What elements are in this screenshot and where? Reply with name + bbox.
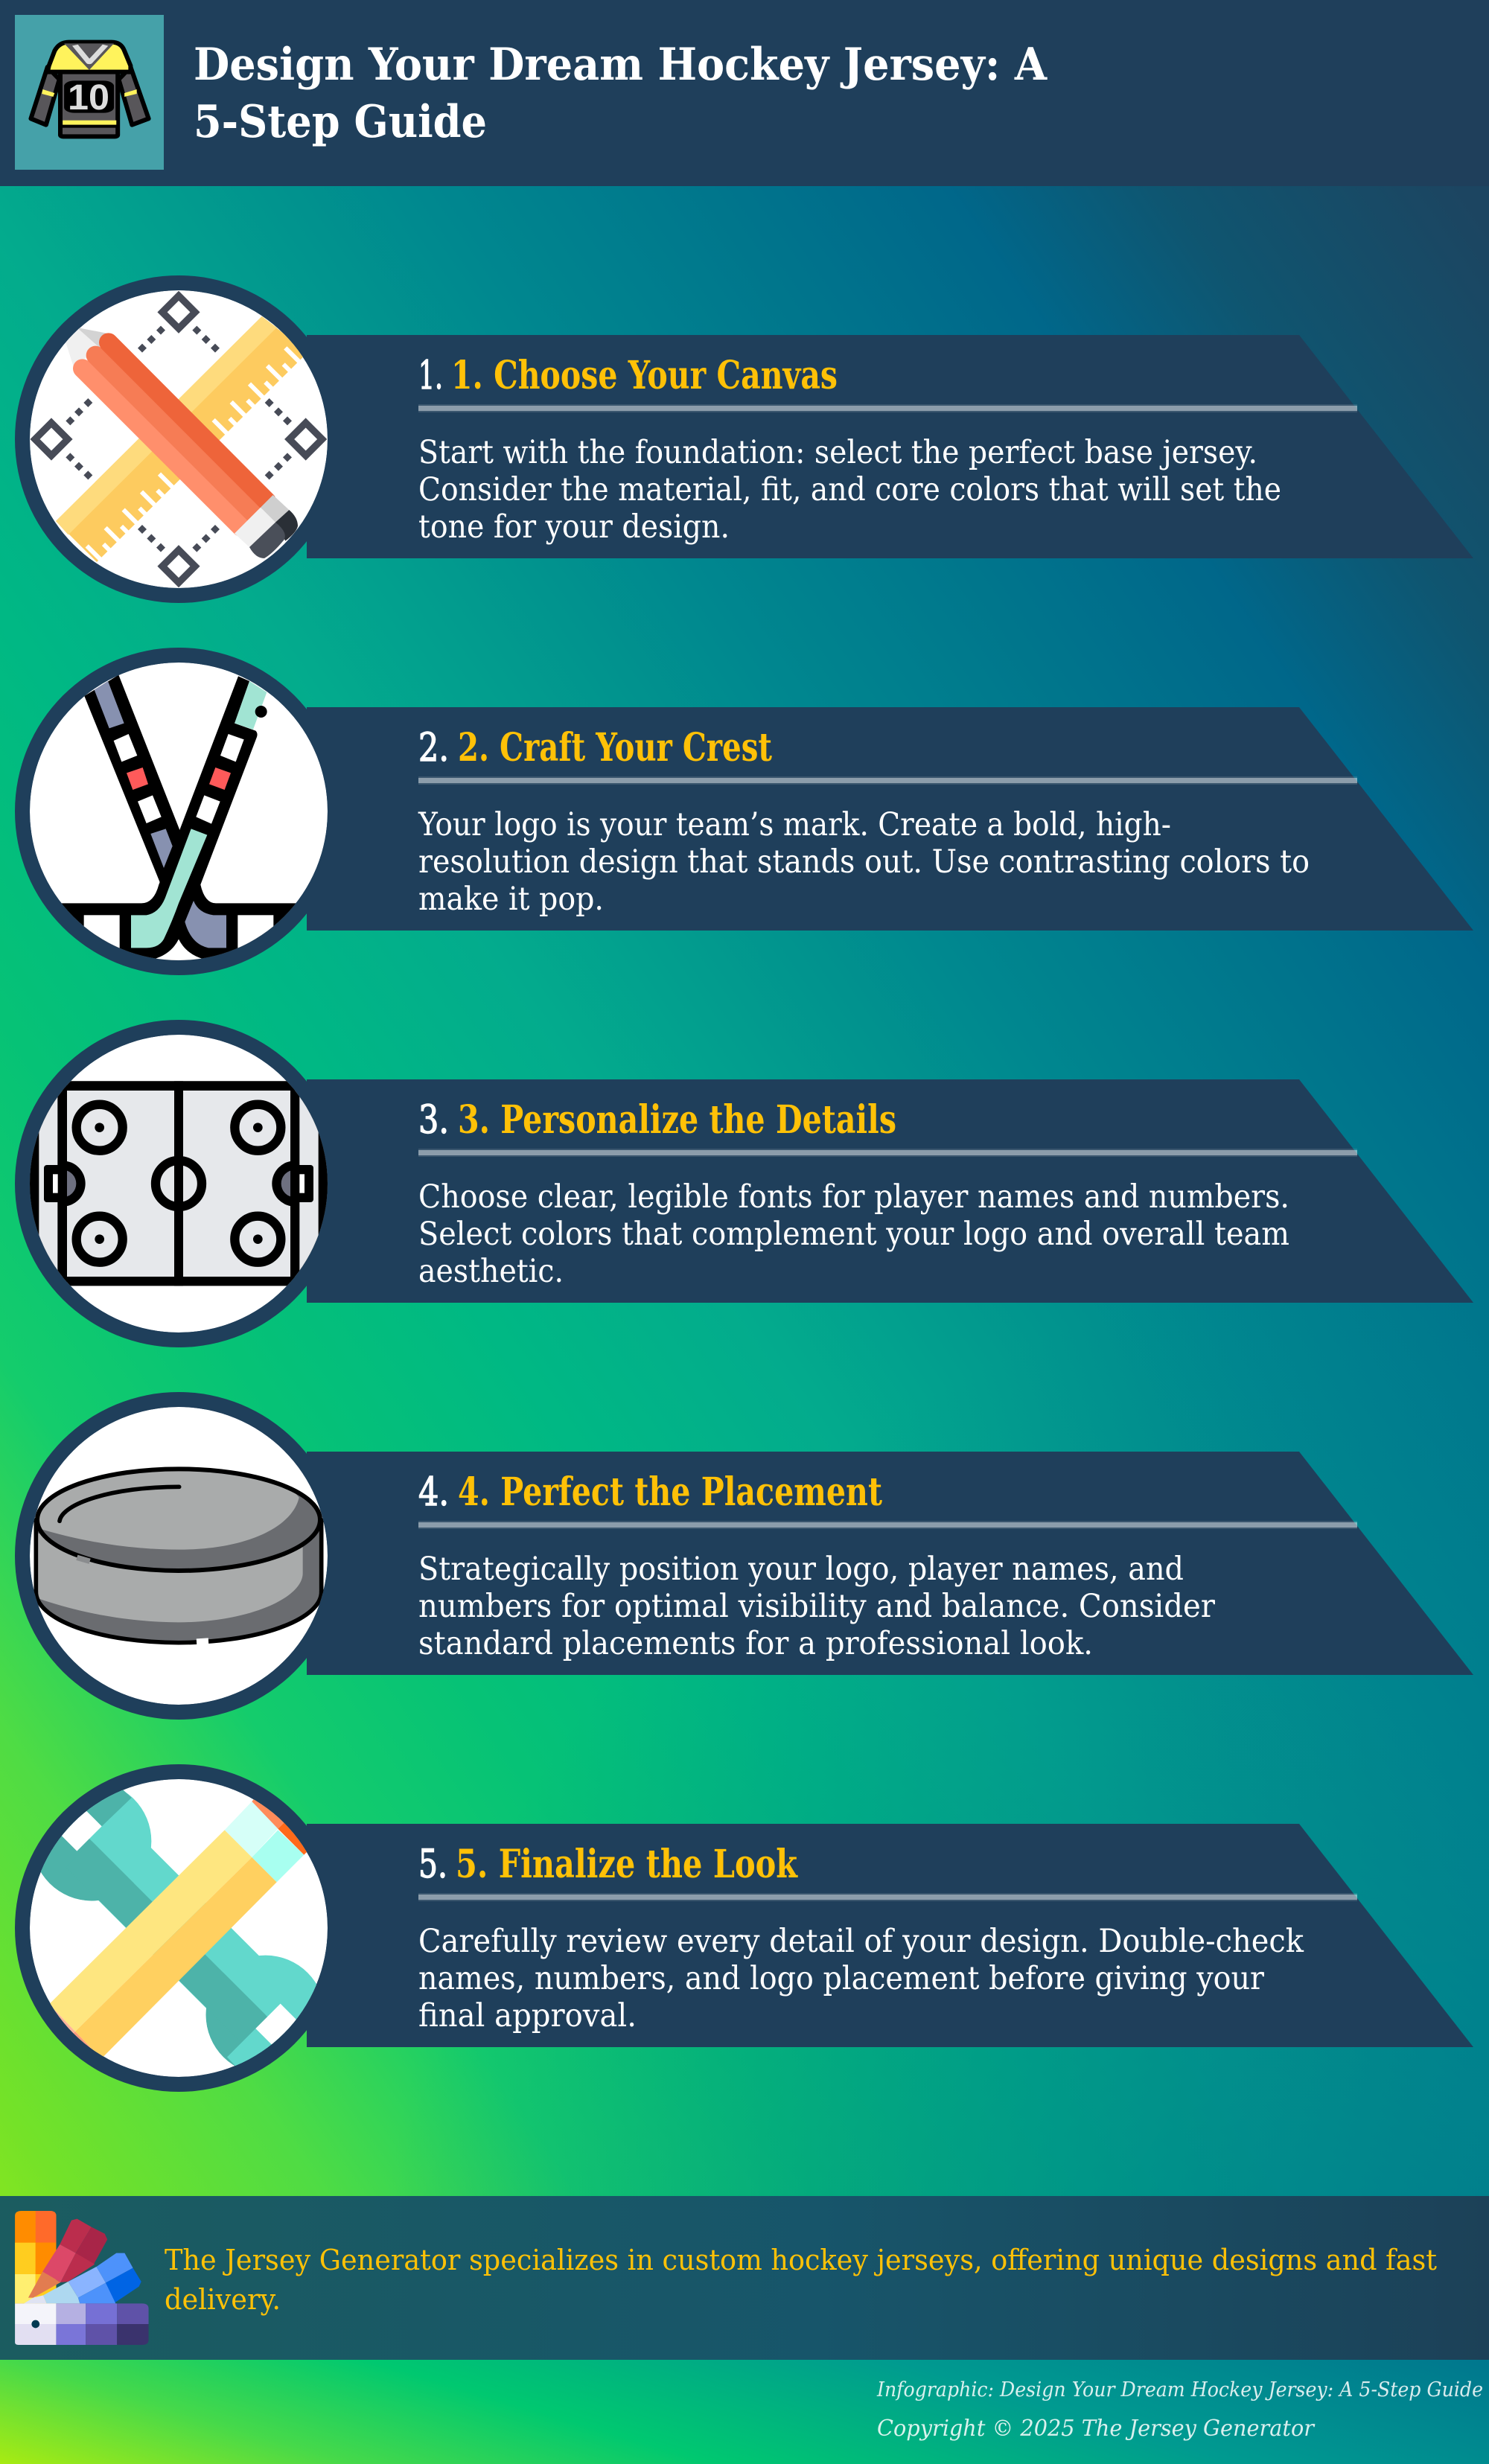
step 5: finalize the look xyxy=(15,1764,1473,2092)
header thumbnail tile with jersey icon: 10 xyxy=(68,78,109,118)
icon: colour swatch fan xyxy=(15,2211,149,2345)
step 2: craft your crest xyxy=(15,648,1473,975)
step 3 banner xyxy=(307,1079,1473,1303)
step 1 body text: tone for your design. xyxy=(418,508,730,546)
step 3 body text xyxy=(418,1178,1289,1290)
title xyxy=(194,39,1048,148)
step 4: perfect the placement xyxy=(15,1392,1473,1720)
attribution lines xyxy=(876,2378,1483,2442)
icon: pencil and wrench xyxy=(30,1779,328,2079)
step 4 heading: 4. Perfect the Placement xyxy=(458,1469,882,1515)
icon: crossed hockey sticks xyxy=(30,663,328,963)
step 1 banner xyxy=(307,335,1473,558)
footer description text xyxy=(165,2244,1437,2316)
step 2 divider xyxy=(418,776,1357,785)
step 2 heading: 2. Craft Your Crest xyxy=(458,725,772,770)
step 4 body text xyxy=(418,1551,1215,1662)
step 1 body text: Start with the foundation: select the perfect base jersey. xyxy=(418,434,1257,471)
step 2 body text: Your logo is your team’s mark. Create a bold, high- xyxy=(418,806,1171,843)
step 5 heading: 5. Finalize the Look xyxy=(456,1842,798,1887)
step 1 divider xyxy=(418,404,1357,412)
step 4 body text: standard placements for a professional look. xyxy=(418,1625,1093,1662)
icon: hockey rink xyxy=(30,1035,328,1332)
step 3 body text: aesthetic. xyxy=(418,1253,564,1290)
step 3 body text: Choose clear, legible fonts for player names and numbers. xyxy=(418,1178,1289,1216)
step 1 heading: 1. Choose Your Canvas xyxy=(451,353,838,398)
attribution lines: Copyright © 2025 The Jersey Generator xyxy=(877,2416,1316,2442)
title: Design Your Dream Hockey Jersey: A xyxy=(194,39,1048,91)
step 2 body text: resolution design that stands out. Use contrasting colors to xyxy=(418,843,1310,881)
icon: hockey puck xyxy=(30,1407,328,1705)
title: 5-Step Guide xyxy=(194,96,487,148)
step 3 divider xyxy=(418,1149,1357,1157)
step 4 banner xyxy=(307,1452,1473,1675)
step 1: choose your canvas xyxy=(15,275,1473,603)
step 4 body text: numbers for optimal visibility and balance. Consider xyxy=(418,1588,1215,1625)
header thumbnail tile with jersey icon xyxy=(15,15,164,170)
step 5 divider xyxy=(418,1893,1357,1901)
step 5 body text: names, numbers, and logo placement before giving your xyxy=(418,1960,1264,1997)
step 1 body text: Consider the material, fit, and core colors that will set the xyxy=(418,471,1281,508)
step 3: personalize the details xyxy=(15,1020,1473,1347)
step 2 body text: make it pop. xyxy=(418,881,604,918)
footer description text: The Jersey Generator specializes in custom hockey jerseys, offering unique designs and fast xyxy=(165,2244,1437,2276)
step 5 banner xyxy=(307,1824,1473,2047)
footer band xyxy=(0,2196,1489,2360)
step 1 body text xyxy=(418,434,1281,546)
icon: ruler and pencil xyxy=(30,290,328,588)
step 3 heading: 3. Personalize the Details xyxy=(458,1097,896,1143)
header band xyxy=(0,0,1489,186)
step 4 divider xyxy=(418,1521,1357,1529)
step 2 body text xyxy=(418,806,1310,918)
step 5 body text: final approval. xyxy=(418,1997,637,2034)
step 3 body text: Select colors that complement your logo and overall team xyxy=(418,1216,1289,1253)
step 1 heading: 1. xyxy=(418,354,443,398)
step 4 heading: 4. xyxy=(418,1470,449,1515)
step 5 body text: Carefully review every detail of your design. Double-check xyxy=(418,1923,1304,1960)
step 2 banner xyxy=(307,707,1473,931)
step 2 heading: 2. xyxy=(418,726,449,770)
step 5 heading: 5. xyxy=(418,1842,447,1887)
footer description text: delivery. xyxy=(165,2283,281,2316)
step 4 body text: Strategically position your logo, player names, and xyxy=(418,1551,1184,1588)
step 3 heading: 3. xyxy=(418,1098,449,1143)
step 5 body text xyxy=(418,1923,1304,2034)
